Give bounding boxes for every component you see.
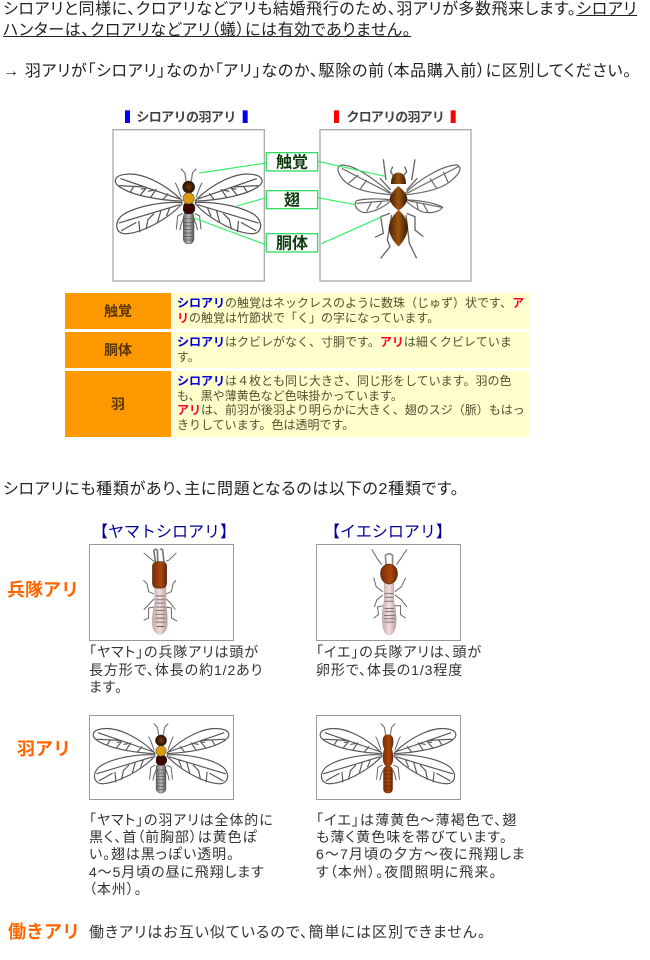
row text: antenna <box>174 293 529 329</box>
text: ie alate <box>316 812 526 880</box>
text: ie soldier: 「イエ」の兵隊アリは、頭が <box>316 644 482 660</box>
row text: wing: アリは、前羽が後羽より明らかに大きく、翅のスジ（脈）もはっ <box>177 403 525 417</box>
text: ie alate: も薄く黄色味を帯びています。 <box>316 829 508 845</box>
illustration: yamato alate <box>89 715 234 800</box>
intro text: ハンターは、クロアリなどアリ（蟻）には有効でありません。 <box>3 22 411 39</box>
row text: body: シロアリはクビレがなく、寸胴です。アリは細くクビレていま <box>177 335 512 349</box>
text: yamato alate <box>89 812 274 897</box>
panel: termite illustration <box>113 130 264 281</box>
text: ie alate: 「イエ」は薄黄色～薄褐色で、翅 <box>316 812 518 828</box>
row text: body <box>174 332 529 368</box>
text: yamato soldier: 「ヤマト」の兵隊アリは頭が <box>89 644 259 660</box>
row header: body <box>65 332 171 368</box>
row text: wing: も、黒や薄黄色など色味掛かっています。 <box>177 388 403 402</box>
row header: wing <box>65 371 171 437</box>
illustration: ie alate <box>316 715 461 800</box>
label: worker: 働きアリ <box>8 922 80 942</box>
text: yamato alate: 「ヤマト」の羽アリは全体的に <box>89 812 274 828</box>
text: ie soldier: 卵形で、体長の1/3程度 <box>316 662 463 678</box>
comparison table <box>65 293 529 437</box>
label: soldier: 兵隊アリ <box>7 580 79 600</box>
label: body <box>266 234 318 253</box>
heading: ant wing: クロアリの羽アリ <box>346 109 445 124</box>
intro text: シロアリと同様に、クロアリなどアリも結婚飛行のため、羽アリが多数飛来します。シロアリ <box>3 1 637 18</box>
section intro text: シロアリにも種類があり、主に問題となるのは以下の2種類です。 <box>3 481 459 498</box>
row text: antenna: シロアリの触覚はネックレスのように数珠（じゅず）状です、ア <box>177 296 524 310</box>
leader lines <box>194 161 385 245</box>
row header: body: 胴体 <box>104 342 132 358</box>
text: ie alate: す（本州）。夜間照明に飛来。 <box>316 864 498 880</box>
label: antenna <box>266 153 318 172</box>
label: alate: 羽アリ <box>17 739 71 759</box>
text: yamato alate: 4～5月頃の昼に飛翔します <box>89 864 265 880</box>
row header: antenna: 触覚 <box>104 303 132 319</box>
row header: wing: 羽 <box>111 396 125 412</box>
text: yamato alate: （本州）。 <box>89 881 142 897</box>
text: ie alate: 6～7月頃の夕方～夜に飛翔しま <box>316 846 526 862</box>
text: yamato alate: 黒く、首（前胸部）は黄色ぽ <box>89 829 258 845</box>
illustration: ie soldier <box>316 544 461 641</box>
text: yamato alate: い。翅は黒っぽい透明。 <box>89 846 235 862</box>
diagram: winged termite vs winged ant comparison <box>112 109 472 282</box>
heading: yamato termite: 【ヤマトシロアリ】 <box>92 524 236 541</box>
row text: body: す。 <box>177 350 200 364</box>
illustration: yamato soldier <box>89 544 234 641</box>
label: body: 胴体 <box>276 235 308 253</box>
label: antenna: 触覚 <box>276 153 308 172</box>
text: yamato soldier: 長方形で、体長の約1/2あり <box>89 662 263 678</box>
text: worker: 働きアリはお互い似ているので、簡単には区別できません。 <box>89 924 486 941</box>
text: ie soldier <box>316 644 482 678</box>
heading: termite wing: シロアリの羽アリ <box>136 109 236 124</box>
text: yamato soldier: ます。 <box>89 679 123 695</box>
label: wing: 翅 <box>284 191 300 210</box>
instruction text: → 羽アリが「シロアリ」なのか「アリ」なのか、駆除の前（本品購入前）に区別してください。 <box>3 63 632 80</box>
heading: ie termite: 【イエシロアリ】 <box>324 524 452 541</box>
row text: wing <box>174 371 529 437</box>
row text: antenna: リの触覚は竹節状で「く」の字になっています。 <box>177 310 439 324</box>
intro text <box>3 0 638 39</box>
label: wing <box>266 191 318 210</box>
row text: wing: きりしています。色は透明です。 <box>177 418 354 432</box>
row text: wing: シロアリは４枚とも同じ大きさ、同じ形をしています。羽の色 <box>177 374 511 388</box>
panel: ant illustration <box>320 130 471 281</box>
row header: antenna <box>65 293 171 329</box>
text: yamato soldier <box>89 644 263 695</box>
